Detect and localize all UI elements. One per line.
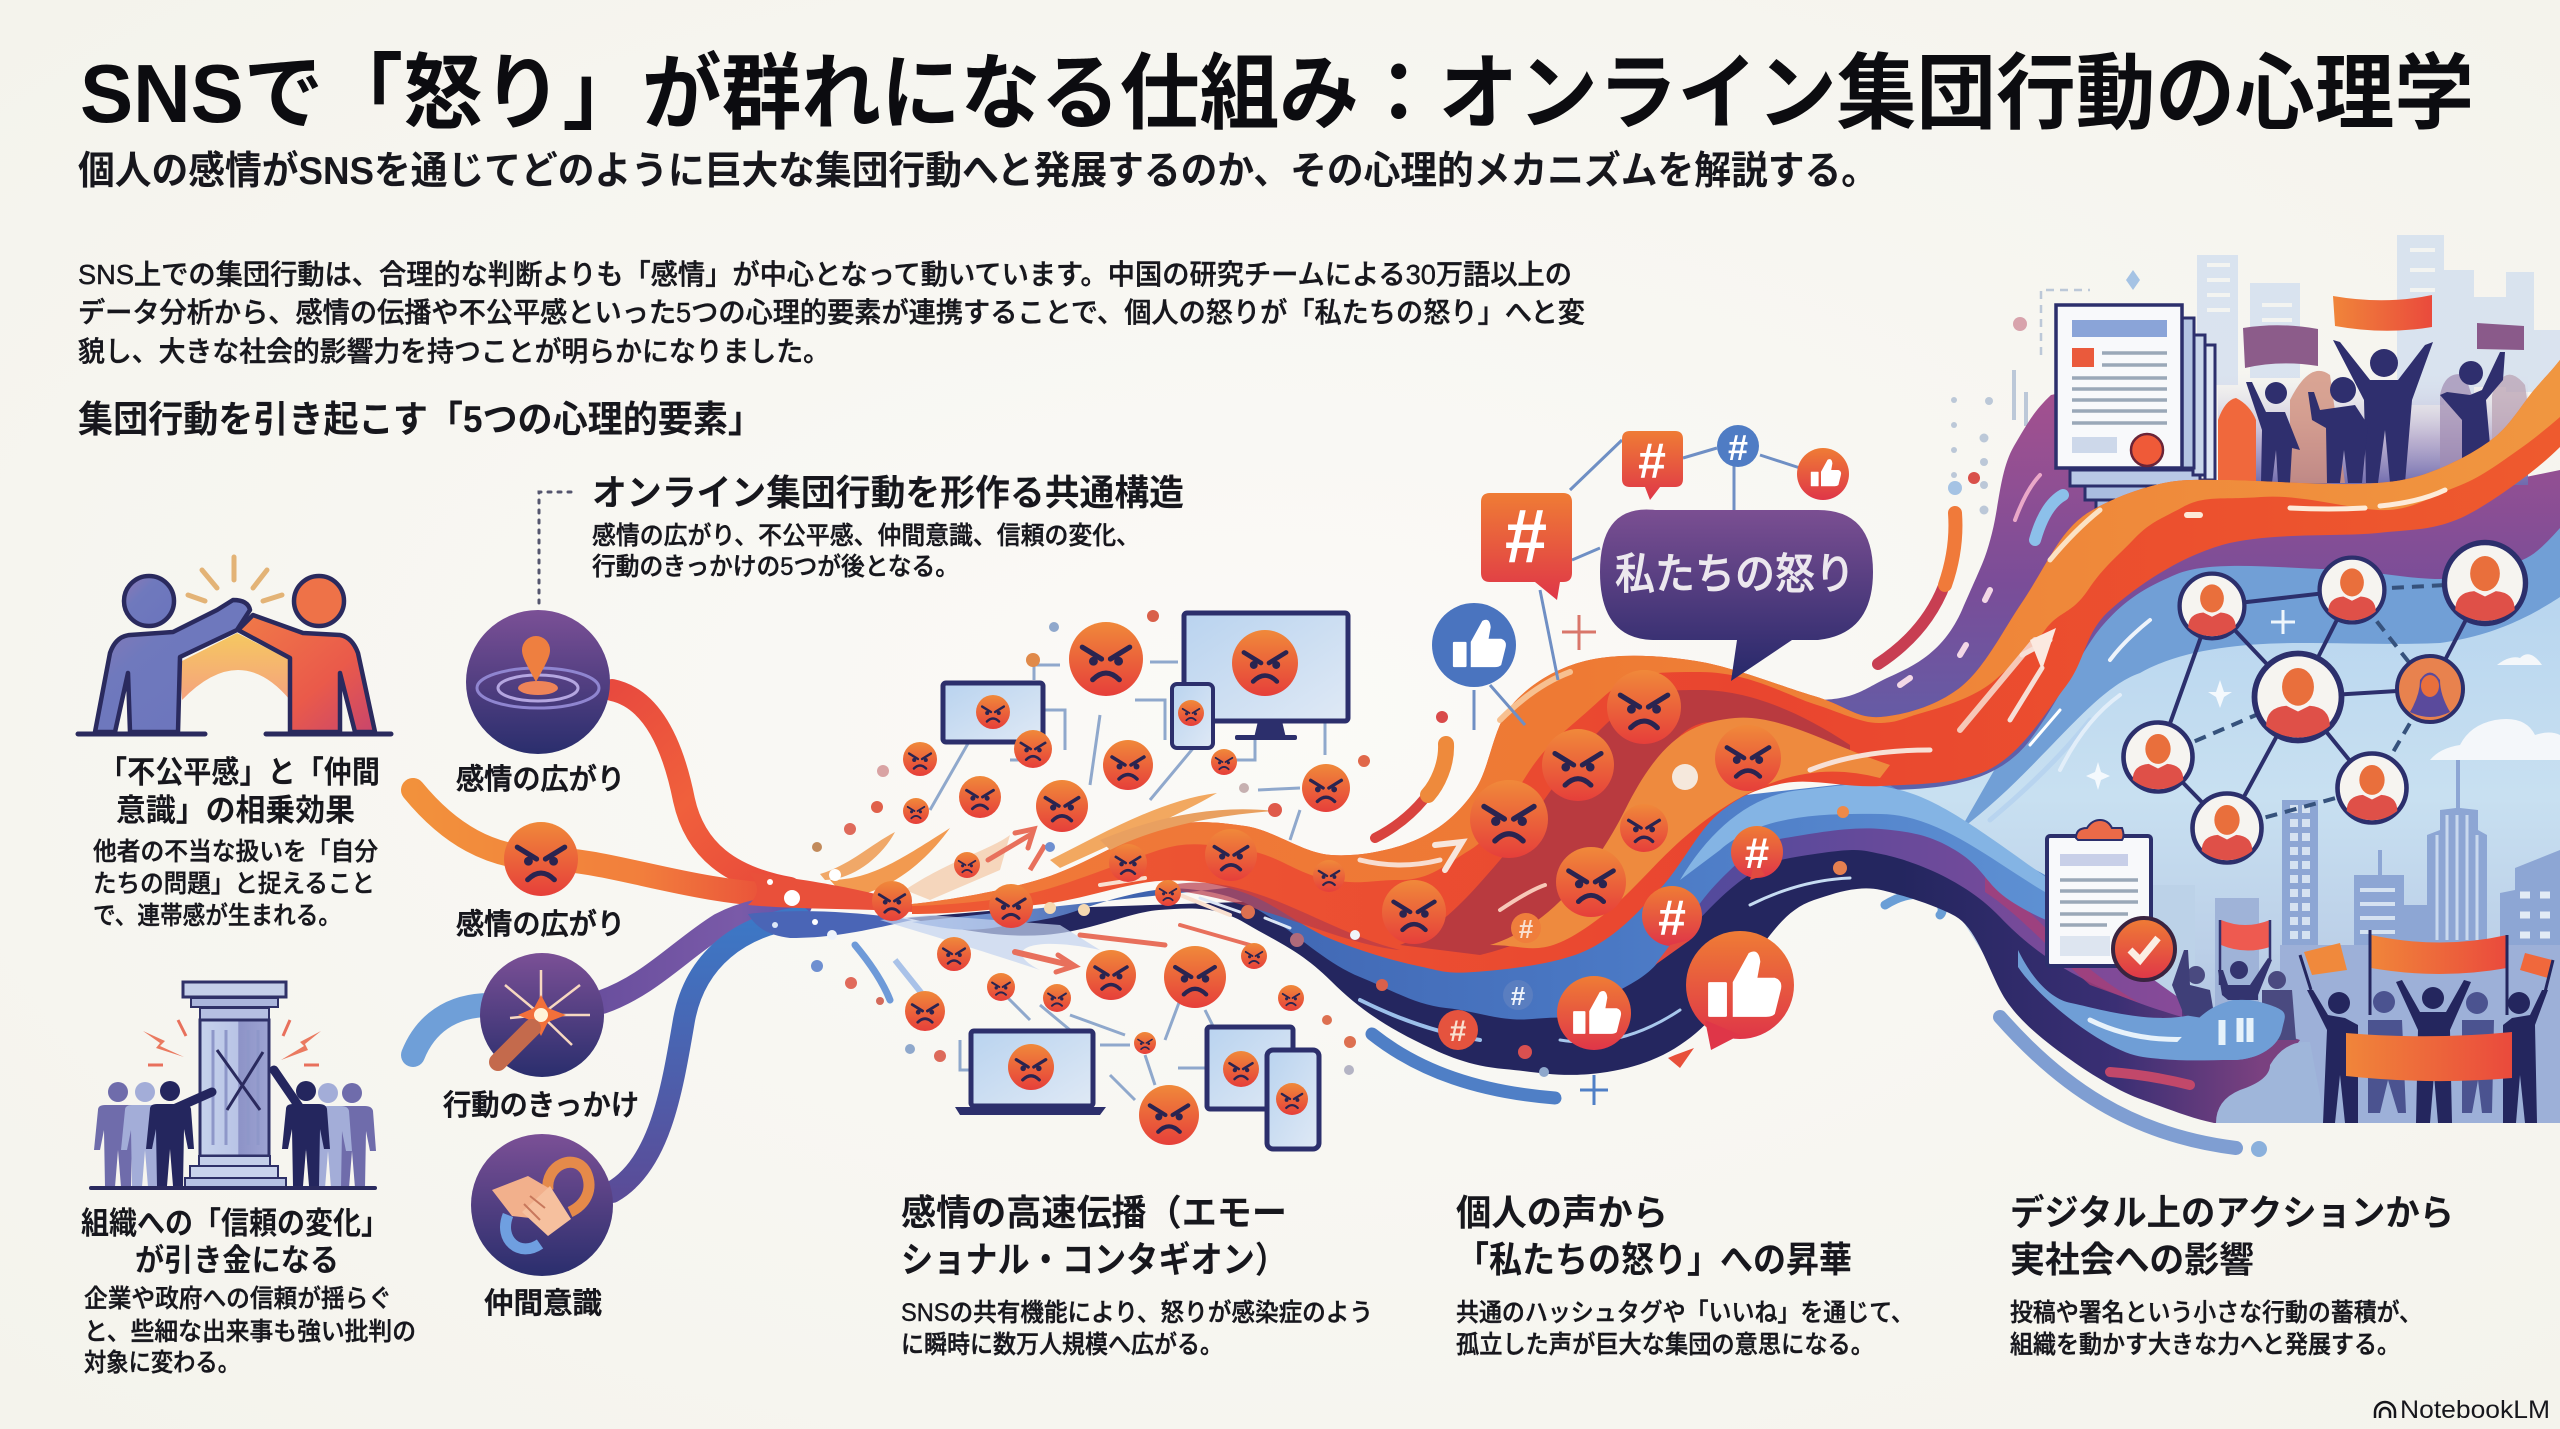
upper tails bbox=[1375, 513, 1955, 838]
scattered particles bbox=[812, 610, 1849, 1077]
icon: two people high five bbox=[78, 557, 391, 734]
bottom column: voice to our anger: 孤立した声が巨大な集団の意思になる。 bbox=[1456, 1331, 1874, 1359]
text: unfairness and solidarity bbox=[93, 838, 378, 930]
intro paragraph bbox=[78, 259, 1585, 367]
lower tails bbox=[1372, 894, 2267, 1157]
text: change in trust: 対象に変わる。 bbox=[84, 1349, 240, 1377]
hashtag orange bbox=[1731, 826, 1783, 880]
light blue band edge bbox=[1680, 784, 2050, 895]
like large bbox=[1686, 931, 1794, 1050]
label: solidarity: 仲間意識 bbox=[484, 1287, 602, 1320]
clipboard with check bbox=[2047, 820, 2175, 980]
hashtag small chips: # bbox=[1519, 914, 1534, 944]
connector network upper devices bbox=[930, 662, 1325, 840]
hashtag orange: # bbox=[1745, 829, 1769, 878]
pale marchers bbox=[2368, 991, 2494, 1113]
like medium bbox=[1557, 976, 1631, 1050]
banner upper bbox=[2371, 935, 2507, 974]
hashtag circle blue bbox=[1717, 425, 1759, 468]
sky panel bbox=[1880, 530, 2560, 1123]
panel: change in trust bbox=[81, 982, 416, 1377]
heading: unfairness and solidarity bbox=[99, 755, 380, 828]
bottom column: voice to our anger bbox=[1456, 1192, 1914, 1359]
blue blob over crowd bbox=[2170, 1000, 2285, 1060]
text: unfairness and solidarity: たちの問題」と捉えること bbox=[93, 870, 375, 898]
bottom column: rapid spread: SNSの共有機能により、怒りが感染症のよう bbox=[901, 1299, 1373, 1327]
speech bubble: our anger bbox=[1600, 510, 1873, 681]
heading: unfairness and solidarity: 「不公平感」と「仲間 bbox=[99, 755, 380, 790]
bottom column: voice to our anger: 個人の声から bbox=[1456, 1192, 1668, 1233]
text: unfairness and solidarity: で、連帯感が生まれる。 bbox=[93, 902, 341, 930]
red flow arrows bbox=[988, 829, 1250, 972]
sparkles in sky bbox=[2086, 680, 2232, 790]
protest crowd with banners bbox=[2300, 930, 2553, 1123]
hashtag bubble small: # bbox=[1638, 433, 1666, 489]
hashtag bubble small bbox=[1622, 431, 1683, 500]
panel: unfairness and solidarity bbox=[78, 557, 391, 930]
centre convergence bbox=[748, 869, 1100, 1010]
intro paragraph: 貌し、大きな社会的影響力を持つことが明らかになりました。 bbox=[78, 336, 830, 367]
node: chain handshake bbox=[471, 1134, 613, 1276]
left input streams bbox=[413, 690, 800, 1192]
laptop top bbox=[943, 683, 1043, 742]
city: lower skyline bbox=[2150, 760, 2560, 1123]
network of people bbox=[2124, 542, 2526, 862]
phone bottom bbox=[1267, 1050, 1319, 1149]
bottom column: voice to our anger: 共通のハッシュタグや「いいね」を通じて、 bbox=[1456, 1299, 1914, 1327]
subtitle: 個人の感情がSNSを通じてどのように巨大な集団行動へと発展するのか、その心理的メカニズムを解説する。 bbox=[78, 150, 1878, 193]
hashtag and like icons in upper cluster bbox=[1432, 425, 1849, 730]
connector lines bbox=[1474, 440, 1800, 730]
intro paragraph: データ分析から、感情の伝播や不公平感といった5つの心理的要素が連携することで、個人の怒りが「私たちの怒り」へと変 bbox=[78, 297, 1585, 328]
stacked documents with seal bbox=[2056, 305, 2215, 510]
label: emotion spread 1: 感情の広がり bbox=[456, 763, 625, 796]
heading: change in trust bbox=[81, 1206, 389, 1278]
icon: cracked pillar with crowd bbox=[91, 982, 376, 1188]
inner orange wave bbox=[1490, 718, 1890, 948]
like bubble orange bbox=[1797, 448, 1849, 500]
node: angry face on stream bbox=[504, 822, 578, 896]
node: spark trigger bbox=[480, 953, 604, 1077]
particles near document bbox=[1948, 270, 2140, 514]
top crowd with flags bbox=[2218, 295, 2530, 485]
label: emotion spread 2: 感情の広がり bbox=[456, 908, 625, 941]
callout: common structure: 感情の広がり、不公平感、仲間意識、信頼の変化、 bbox=[592, 522, 1140, 550]
bottom column: rapid spread: 感情の高速伝播（エモー bbox=[901, 1192, 1287, 1233]
speech bubble: our anger: 私たちの怒り bbox=[1615, 551, 1855, 599]
red lower strip bbox=[1170, 883, 1400, 950]
hashtag red bbox=[1642, 886, 1702, 965]
hashtag circle blue: # bbox=[1728, 427, 1748, 468]
upper purple band bbox=[1814, 380, 2560, 790]
hashtag small chips: # bbox=[1450, 1015, 1467, 1048]
bottom column: rapid spread bbox=[901, 1192, 1373, 1359]
text: change in trust: と、些細な出来事も強い批判の bbox=[84, 1318, 416, 1346]
bottom column: digital to real: 投稿や署名という小さな行動の蓄積が、 bbox=[2010, 1299, 2422, 1327]
heading: change in trust: 組織への「信頼の変化」 bbox=[81, 1206, 389, 1241]
laptop bottom bbox=[955, 1031, 1106, 1115]
callout: common structure: オンライン集団行動を形作る共通構造 bbox=[592, 472, 1184, 513]
like circle blue bbox=[1432, 603, 1516, 687]
bottom column: rapid spread: ショナル・コンタギオン） bbox=[901, 1239, 1287, 1280]
small crowd with flag bbox=[2172, 920, 2296, 1040]
clouds bbox=[2430, 654, 2560, 760]
blue blob bbox=[2018, 950, 2283, 1060]
node: emotion spread ripple bbox=[466, 610, 610, 754]
hashtag small chips bbox=[1438, 913, 1541, 1050]
hashtag small chips: # bbox=[1511, 981, 1526, 1011]
heading: change in trust: が引き金になる bbox=[135, 1243, 339, 1278]
navy lower band bbox=[907, 830, 2300, 1123]
highlights and arrows on flow bbox=[1100, 490, 2445, 1042]
banner lower bbox=[2346, 1032, 2512, 1081]
dark inner wave bbox=[1400, 690, 1850, 955]
callout: common structure bbox=[539, 472, 1184, 604]
hashtag bubble large: # bbox=[1505, 494, 1547, 579]
network links bbox=[2158, 583, 2485, 828]
blue band under purple bbox=[1960, 520, 2560, 830]
monitor bbox=[1184, 613, 1348, 740]
text: change in trust bbox=[84, 1285, 416, 1377]
accents on purple band bbox=[1900, 475, 2063, 685]
callout: common structure: 行動のきっかけの5つが後となる。 bbox=[592, 553, 959, 581]
main red flow bbox=[912, 360, 2560, 973]
NotebookLM mark: NotebookLM bbox=[2400, 1396, 2550, 1424]
orange top layer bbox=[912, 360, 2560, 906]
city: upper skyline bbox=[2197, 235, 2560, 405]
cloud base bbox=[2216, 1042, 2325, 1123]
hashtag red: # bbox=[1658, 890, 1686, 946]
intro paragraph: SNS上での集団行動は、合理的な判断よりも「感情」が中心となって動いています。中国の研究チームによる30万語以上の bbox=[78, 259, 1572, 290]
bottom column: digital to real: 実社会への影響 bbox=[2010, 1239, 2254, 1280]
bottom column: voice to our anger: 「私たちの怒り」への昇華 bbox=[1456, 1239, 1852, 1280]
lower social icons bbox=[1438, 826, 1794, 1105]
blue lower band bbox=[912, 780, 2090, 1020]
bottom column: digital to real bbox=[2010, 1192, 2454, 1359]
connector network lower devices bbox=[960, 990, 1215, 1100]
heading: unfairness and solidarity: 意識」の相乗効果 bbox=[116, 793, 355, 828]
phone top bbox=[1172, 684, 1213, 748]
text: change in trust: 企業や政府への信頼が揺らぐ bbox=[84, 1285, 392, 1313]
maroon strip bbox=[1985, 872, 2140, 1003]
title: SNSで「怒り」が群れになる仕組み：オンライン集団行動の心理学 bbox=[80, 47, 2474, 140]
bottom column: rapid spread: に瞬時に数万人規模へ広がる。 bbox=[901, 1331, 1223, 1359]
side flags bbox=[2304, 943, 2347, 975]
label: trigger: 行動のきっかけ bbox=[443, 1089, 639, 1122]
hashtag bubble large bbox=[1481, 493, 1572, 600]
text: unfairness and solidarity: 他者の不当な扱いを「自分 bbox=[93, 838, 378, 866]
bottom column: digital to real: 組織を動かす大きな力へと発展する。 bbox=[2010, 1331, 2400, 1359]
marchers bbox=[2307, 980, 2548, 1123]
angry faces cluster bbox=[872, 622, 1781, 1145]
purple lower band bbox=[1620, 800, 2182, 1017]
bottom column: digital to real: デジタル上のアクションから bbox=[2010, 1192, 2454, 1233]
plus and sparkle marks bbox=[1562, 615, 1596, 650]
orange splash from centre bbox=[820, 793, 1274, 900]
section heading: five factors: 集団行動を引き起こす「5つの心理的要素」 bbox=[78, 399, 763, 440]
tablet bbox=[1207, 1027, 1293, 1109]
